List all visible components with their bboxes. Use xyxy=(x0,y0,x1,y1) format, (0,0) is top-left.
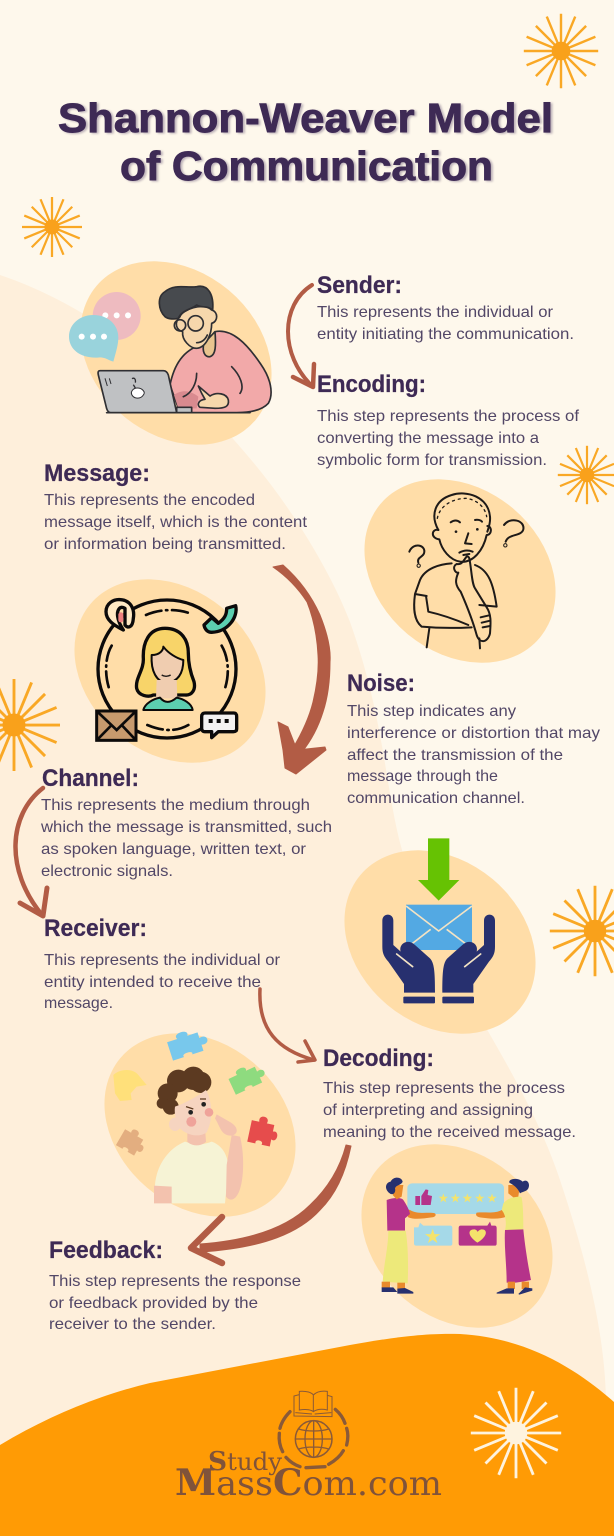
logo: StudyMassCom xyxy=(175,1391,442,1504)
text block: encoding: This step represents the process of xyxy=(317,408,580,425)
icon: book and globe xyxy=(279,1391,348,1468)
logo text: Study xyxy=(208,1447,282,1477)
arrow: sender to encoding xyxy=(288,285,314,387)
panel: sender illustration xyxy=(44,223,308,483)
text block: message xyxy=(44,460,308,553)
arrow: receiver to decoding xyxy=(260,989,315,1062)
text block: noise: Noise: xyxy=(347,670,415,697)
text block: decoding xyxy=(323,1045,576,1141)
icon: man thinking with puzzle pieces xyxy=(113,1025,281,1203)
text block: noise: affect the transmission of the xyxy=(347,747,563,764)
icon: thinking man with question marks xyxy=(409,493,523,648)
arrow: channel to receiver xyxy=(15,788,47,916)
sunburst: left of channel xyxy=(0,679,60,771)
text block: encoding xyxy=(317,371,580,469)
text block: decoding: of interpreting and assigning xyxy=(323,1102,533,1119)
title xyxy=(58,95,553,189)
text block: channel: which the message is transmitted, such xyxy=(40,819,332,836)
text block: noise: communication channel. xyxy=(347,790,525,807)
sunburst: footer cream xyxy=(471,1388,561,1478)
text block: message: message itself, which is the content xyxy=(44,514,308,531)
text block: sender: Sender: xyxy=(317,272,402,299)
text block: feedback: Feedback: xyxy=(49,1237,163,1264)
text block: noise: message through the xyxy=(347,768,498,785)
text block: encoding: converting the message into a xyxy=(317,430,539,447)
panel: encoding illustration xyxy=(328,441,592,701)
panel: receiver illustration xyxy=(68,995,332,1255)
text block: channel: Channel: xyxy=(42,765,139,792)
text block: message: This represents the encoded xyxy=(44,492,255,509)
text block: sender xyxy=(317,272,574,343)
text block: noise: This step indicates any xyxy=(347,703,516,720)
text block: feedback: or feedback provided by the xyxy=(49,1295,258,1312)
text block: receiver: message. xyxy=(44,995,113,1012)
text block: feedback xyxy=(49,1237,301,1333)
sunburst: right of encoding xyxy=(558,446,614,504)
text block: channel: This represents the medium through xyxy=(41,797,310,814)
arrow: message to channel xyxy=(273,565,330,774)
text block: receiver: This represents the individual or xyxy=(44,952,281,969)
title: of Communication xyxy=(120,143,493,189)
text block: channel xyxy=(40,765,332,880)
text block: channel: as spoken language, written text, or xyxy=(41,841,307,858)
text block: feedback: receiver to the sender. xyxy=(49,1316,216,1333)
logo text: MassCom.com xyxy=(175,1462,442,1504)
text block: decoding: meaning to the received message. xyxy=(323,1124,576,1141)
sunburst: top right xyxy=(524,14,598,88)
sunburst: upper left xyxy=(22,197,82,257)
text block: noise xyxy=(347,670,600,807)
text block: receiver xyxy=(44,915,281,1012)
text block: decoding: Decoding: xyxy=(323,1045,434,1072)
arrow: decoding to feedback xyxy=(191,1145,351,1263)
text block: sender: This represents the individual or xyxy=(317,304,554,321)
icon: woman surrounded by communication channels xyxy=(97,600,237,740)
text block: message: or information being transmitted. xyxy=(44,536,286,553)
orange footer wave xyxy=(0,1334,614,1536)
text block: feedback: This step represents the response xyxy=(49,1273,301,1290)
panel: decoding icon illustration xyxy=(308,812,572,1072)
icon: person at laptop with chat bubbles xyxy=(69,286,271,413)
sunburst: right of hands xyxy=(550,886,614,976)
panel: message illustration xyxy=(38,541,302,801)
panel: decoding illustration xyxy=(325,1106,589,1366)
text block: receiver: entity intended to receive the xyxy=(44,974,261,991)
text block: encoding: symbolic form for transmission. xyxy=(317,452,547,469)
text block: encoding: Encoding: xyxy=(317,371,426,398)
icon: hands holding envelope with green arrow xyxy=(382,838,495,1003)
text block: noise: interference or distortion that may xyxy=(347,725,600,742)
text block: sender: entity initiating the communication. xyxy=(317,326,574,343)
icon: two people holding ratings xyxy=(382,1178,532,1295)
text block: channel: electronic signals. xyxy=(41,863,173,880)
text block: decoding: This step represents the process xyxy=(323,1080,565,1097)
title: Shannon-Weaver Model xyxy=(58,95,553,141)
text block: message: Message: xyxy=(44,460,150,487)
text block: receiver: Receiver: xyxy=(44,915,147,942)
